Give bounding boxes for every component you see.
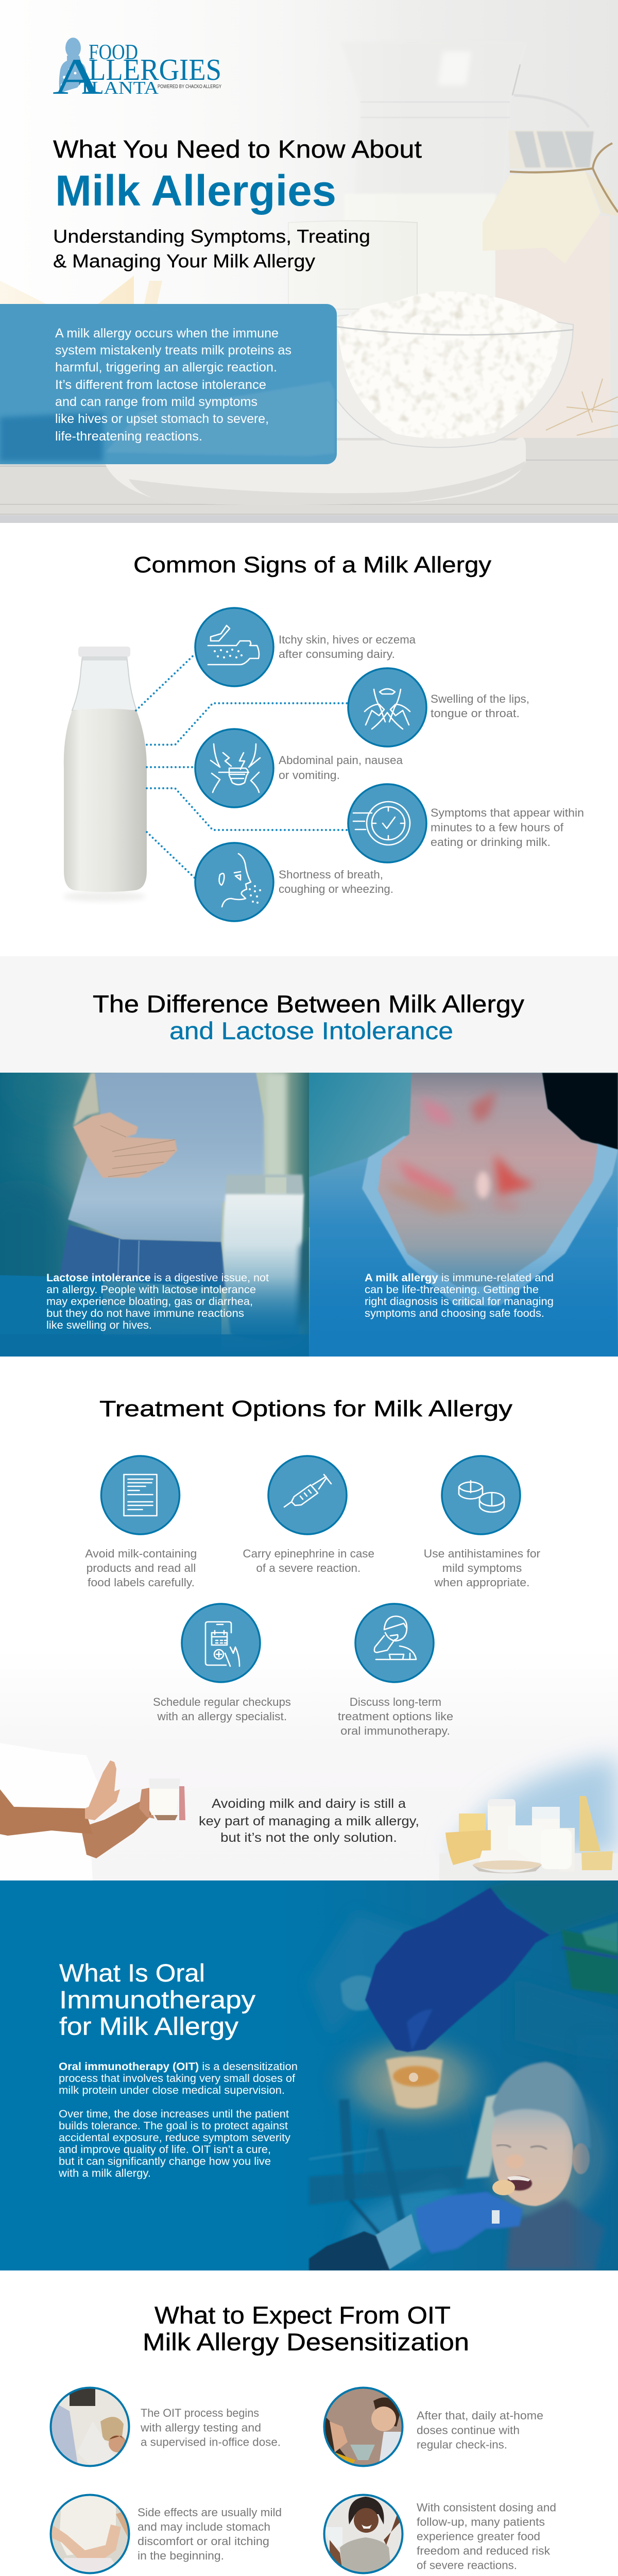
OIT goal text: but it can significantly change how you live [59,2155,271,2167]
text: symptom timing: minutes to a few hours of [431,821,564,834]
text: antihistamines: Use antihistamines for [424,1547,540,1560]
icon: phone calendar [182,1604,260,1682]
heading: Immunotherapy [59,1987,255,2014]
text: side effects: and may include stomach [138,2520,270,2533]
OIT goal text: accidental exposure, reduce symptom severity [59,2131,290,2144]
OIT definition text [59,2060,298,2096]
heading: Common Signs of a Milk Allergy [133,552,491,578]
text: consistent dosing: of severe reactions. [417,2559,517,2572]
text: antihistamines: when appropriate. [434,1576,530,1589]
text: itchy skin: after consuming dairy. [279,648,395,660]
logo: Food Allergies Atlanta: FOOD [89,41,138,64]
text: consistent dosing: follow-up, many patients [417,2515,545,2529]
OIT definition text: milk protein under close medical supervision. [59,2084,285,2096]
heading: What Is Oral [59,1960,205,1987]
photo: person refusing milk [0,1743,185,1880]
icon: abdominal pain [195,729,273,807]
text: abdominal pain: Abdominal pain, nausea [279,754,403,767]
marble plate [102,437,526,505]
text: process begins: with allergy testing and [140,2421,261,2434]
text: swelling: tongue or throat. [431,707,520,720]
text: consistent dosing: freedom and reduced risk [417,2545,551,2557]
icon: antihistamine pills [442,1456,520,1534]
heading [59,1960,255,2040]
logo: Food Allergies Atlanta: LLERGIES [89,53,221,87]
icon: shortness of breath [195,843,273,921]
heading: The Difference Between Milk Allergy [93,990,525,1018]
photo: doctor with patient [50,2387,129,2473]
icon: throat swelling [348,668,426,747]
photo: child eating from spoon [324,2387,403,2468]
callout text: key part of managing a milk allergy, [199,1814,419,1828]
hero background photo: dairy still life [0,0,618,523]
title: Understanding Symptoms, Treating [53,226,370,247]
cheese wedges [0,276,134,304]
panel: common signs [63,552,584,921]
wheat stalks [546,379,618,435]
text: shortness of breath: coughing or wheezing. [279,883,393,895]
text: epinephrine: Carry epinephrine in case [243,1547,374,1560]
text: process begins: a supervised in-office dose. [141,2436,281,2448]
text: avoid milk: Avoid milk-containing [85,1547,197,1560]
text: at-home doses: doses continue with [417,2424,520,2437]
clinic background [309,1911,618,2262]
text: side effects: discomfort or oral itching [138,2535,269,2548]
text: avoid milk: products and read all [87,1562,196,1574]
intro text: and can range from mild symptoms [55,395,258,409]
panel: treatment options [0,1357,618,1880]
icon: epinephrine syringe [268,1456,347,1534]
text: epinephrine: of a severe reaction. [256,1562,360,1574]
text: consistent dosing: With consistent dosing and [417,2501,556,2514]
milk allergy text: A milk allergy is immune-related and [365,1272,554,1284]
text: antihistamines [424,1547,540,1589]
text: immunotherapy: treatment options like [338,1710,453,1723]
icon: itchy hand [195,608,273,686]
text: itchy skin: Itchy skin, hives or eczema [279,633,416,646]
text: avoid milk: food labels carefully. [88,1576,195,1589]
title: & Managing Your Milk Allergy [53,250,315,272]
intro text: A milk allergy occurs when the immune [55,326,279,341]
text: immunotherapy: oral immunotherapy. [340,1724,450,1737]
panel: oral immunotherapy [0,1880,618,2270]
text: epinephrine [243,1547,374,1574]
panel: what to expect [50,2301,556,2573]
tray [561,1922,618,1995]
callout text [199,1797,419,1845]
blue text overlay [0,1275,309,1357]
OIT goal text: with a milk allergy. [58,2167,151,2179]
wooden table [0,438,618,523]
lactose intolerance text: Lactose intolerance is a digestive issue, not [46,1272,269,1284]
text: side effects: in the beginning. [138,2549,224,2562]
panel: milk allergy [309,1073,618,1357]
heading: Treatment Options for Milk Allergy [99,1396,512,1421]
photo: woman holding stomach with glass of milk [0,1073,309,1334]
heading [143,2301,469,2355]
OIT goal text: Over time, the dose increases until the patient [59,2108,289,2120]
panel: difference heading band [0,956,618,1073]
milk allergy text [365,1272,554,1319]
text: abdominal pain: or vomiting. [279,769,340,782]
icon: clock timing [348,784,426,862]
text: side effects: Side effects are usually mild [138,2506,282,2519]
photo: child with stomach ache [50,2495,129,2573]
photo: child receiving OIT dose [0,1880,618,2270]
OIT definition text: process that involves taking very small doses of [59,2072,295,2084]
text: abdominal pain [279,754,403,782]
milk allergy text: right diagnosis is critical for managing [365,1295,554,1308]
photo: neck rash [309,1073,618,1357]
glass of yogurt [288,221,417,309]
text: swelling: Swelling of the lips, [431,692,529,705]
text: immunotherapy: Discuss long-term [350,1696,441,1708]
text: at-home doses [417,2409,543,2451]
icon: person taking dose [355,1604,434,1682]
text: regular checkups: with an allergy specialist. [157,1710,287,1723]
lactose intolerance text: like swelling or hives. [46,1319,152,1331]
text: symptom timing: eating or drinking milk. [431,836,551,849]
text: process begins: The OIT process begins [141,2406,259,2419]
medicine cup [386,2057,443,2108]
photo: happy child with milk [324,2495,403,2573]
dotted connectors [136,654,348,878]
text: regular checkups [153,1696,291,1723]
chair legs [309,2099,464,2236]
intro text: system mistakenly treats milk proteins as [55,343,291,358]
text: itchy skin [279,633,416,660]
logo: Food Allergies Atlanta: POWERED BY CHACKO ALLERGY [158,84,221,90]
lactose intolerance text [46,1272,269,1331]
OIT goal text [58,2108,290,2179]
logo: Food Allergies Atlanta: A [53,48,102,105]
title: What You Need to Know About [53,136,422,163]
text: consistent dosing: experience greater food [417,2530,540,2543]
heading: for Milk Allergy [59,2013,238,2040]
title [53,136,422,272]
panel: hero [0,0,618,523]
text: symptom timing: Symptoms that appear within [431,806,584,819]
lactose intolerance text: may experience bloating, gas or diarrhea, [46,1295,253,1308]
intro text [55,326,291,444]
text: regular checkups: Schedule regular checkups [153,1696,291,1708]
lactose intolerance text: an allergy. People with lactose intolerance [46,1283,256,1296]
text: process begins [140,2406,281,2448]
milk allergy text: can be life-threatening. Getting the [365,1283,539,1296]
OIT goal text: builds tolerance. The goal is to protect against [59,2120,288,2132]
milk allergy text: symptoms and choosing safe foods. [365,1307,544,1319]
text: consistent dosing [417,2501,556,2572]
heading [93,990,525,1044]
text: symptom timing [431,806,584,849]
intro text: like hives or upset stomach to severe, [55,412,269,426]
photo: dairy products [439,1757,618,1880]
blue intro panel [0,304,337,464]
heading: What to Expect From OIT [154,2301,451,2329]
text: swelling [431,692,529,720]
text: immunotherapy [338,1696,453,1737]
logo: Food Allergies Atlanta: TLANTA [79,78,159,98]
text: at-home doses: After that, daily at-home [417,2409,543,2422]
title: Milk Allergies [55,166,336,215]
panel: lactose intolerance [0,1056,309,1357]
text: antihistamines: mild symptoms [442,1562,522,1574]
intro text: life-threatening reactions. [55,429,202,444]
text: shortness of breath [279,868,393,895]
child [467,2062,618,2270]
heading: and Lactose Intolerance [169,1017,453,1044]
intro text: harmful, triggering an allergic reaction. [55,360,277,375]
heading: Milk Allergy Desensitization [143,2328,469,2355]
gloved hand and sleeve [309,2192,523,2270]
bowl of cottage cheese [337,293,574,448]
lactose intolerance text: but they do not have immune reactions [46,1307,244,1319]
text: side effects [138,2506,282,2562]
milk bottle with cloth top [483,130,618,438]
text: at-home doses: regular check-ins. [417,2438,507,2451]
callout text: but it’s not the only solution. [220,1831,397,1845]
milk bottle photo [63,647,147,902]
text: avoid milk [85,1547,197,1589]
logo: Food Allergies Atlanta [53,38,221,105]
icon: food label [101,1456,179,1534]
callout text: Avoiding milk and dairy is still a [212,1797,406,1811]
OIT goal text: and improve quality of life. OIT isn’t a cure, [59,2143,271,2156]
glass jug [360,53,590,297]
OIT definition text: Oral immunotherapy (OIT) is a desensitization [59,2060,298,2073]
text: shortness of breath: Shortness of breath, [279,868,383,881]
intro text: It’s different from lactose intolerance [55,378,266,392]
